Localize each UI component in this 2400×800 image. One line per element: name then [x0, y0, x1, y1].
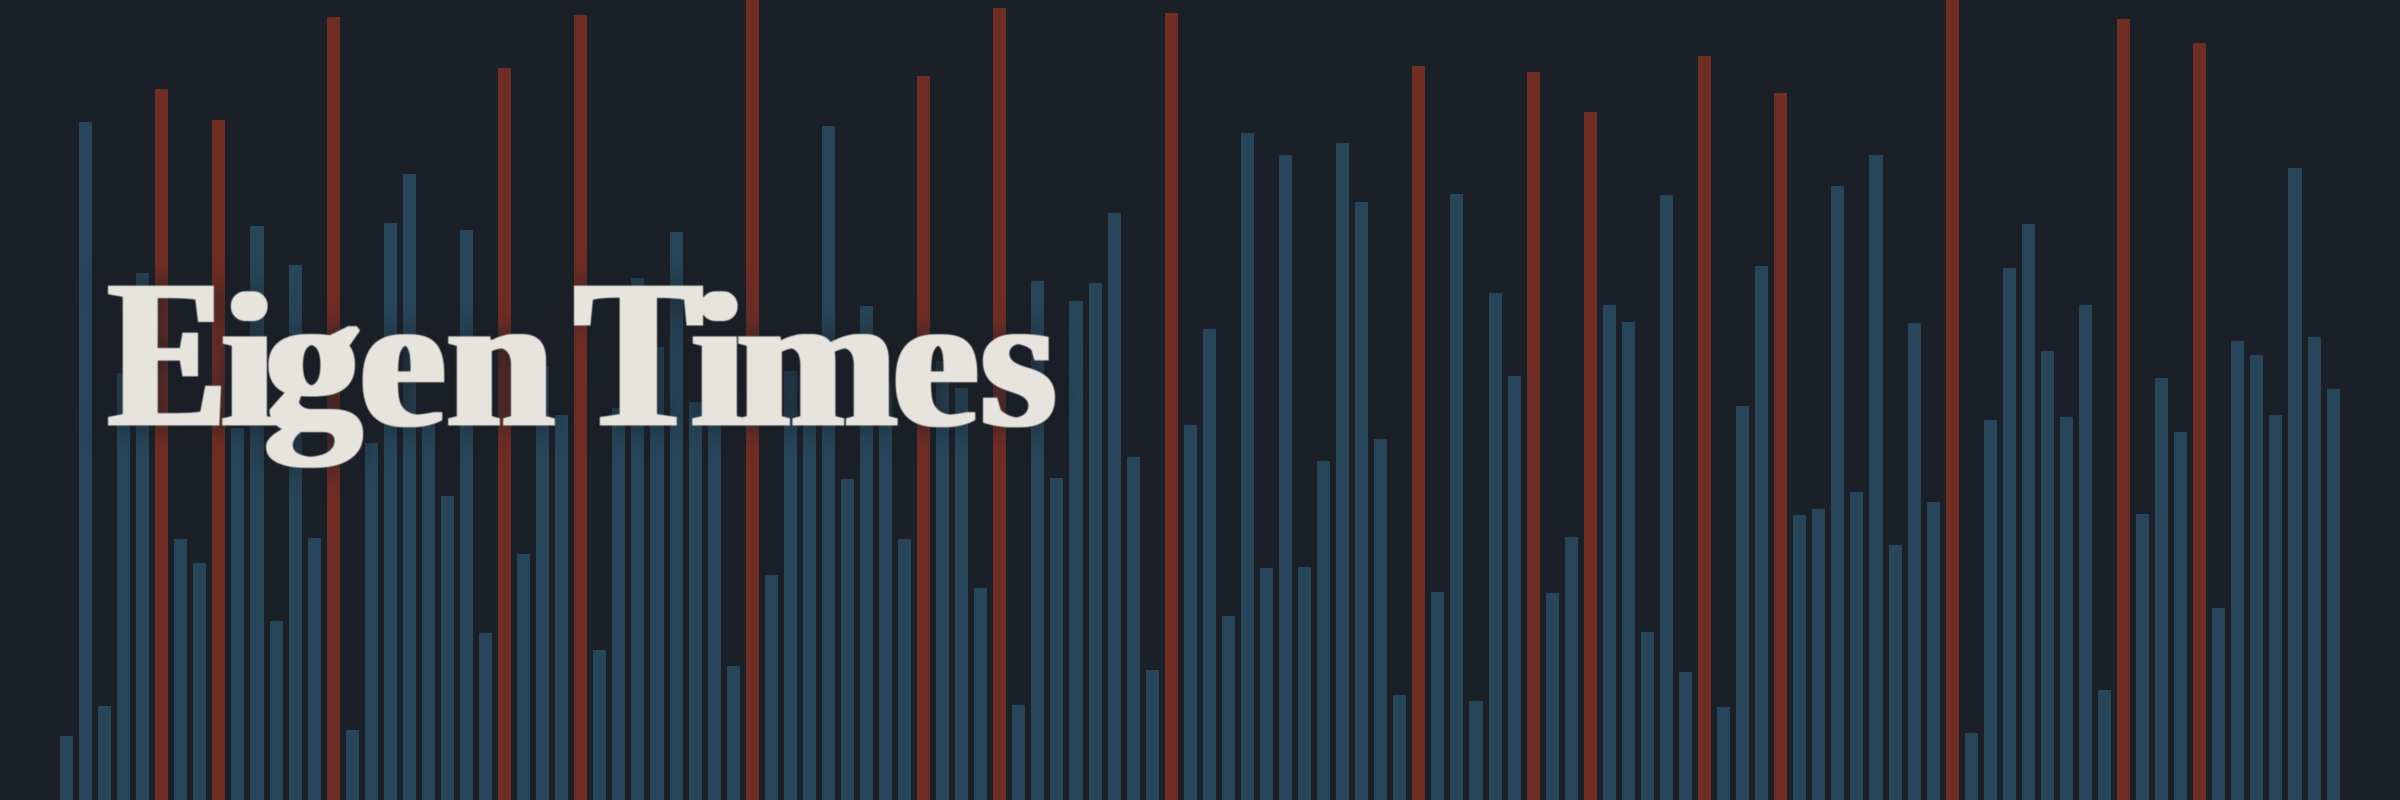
title: E	[109, 236, 226, 471]
title: imes	[692, 254, 1056, 467]
title: T	[575, 236, 702, 471]
title: igen	[222, 254, 608, 468]
